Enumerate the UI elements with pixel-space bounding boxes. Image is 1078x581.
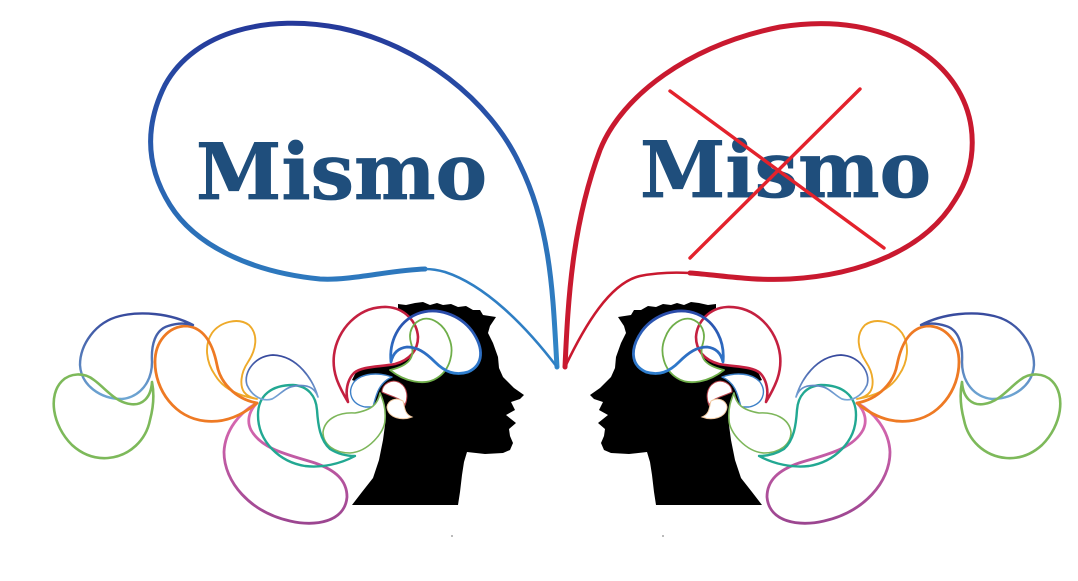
speech bubble: blue (agreement) (151, 23, 557, 367)
brain drop: upper (382, 381, 407, 405)
swirl: small navy (246, 355, 318, 400)
word: Mismo crossed out (right bubble): Mismo (640, 125, 931, 216)
brain loop: red (334, 307, 418, 402)
swirl: large blue (80, 313, 193, 399)
head with thought swirls: left (54, 302, 524, 523)
brain drop: lower (387, 399, 412, 419)
swirl: light green (323, 393, 385, 453)
swirl: orange (155, 326, 257, 421)
brain loop: small blue (351, 374, 392, 407)
swirl: yellow (207, 321, 257, 399)
swirl: teal (258, 385, 355, 467)
swirl: large green (54, 374, 153, 458)
head with thought swirls: right (mirrored) (590, 302, 1060, 523)
word: Mismo (left bubble): Mismo (196, 127, 487, 218)
head silhouette (352, 302, 524, 505)
brain loop: green (390, 319, 452, 382)
speech bubble: red (disagreement) (565, 24, 972, 367)
brain loop: blue (391, 311, 481, 374)
swirl: purple pink (224, 403, 347, 523)
small specks at bottom (451, 535, 664, 537)
red cross over word (670, 89, 884, 258)
